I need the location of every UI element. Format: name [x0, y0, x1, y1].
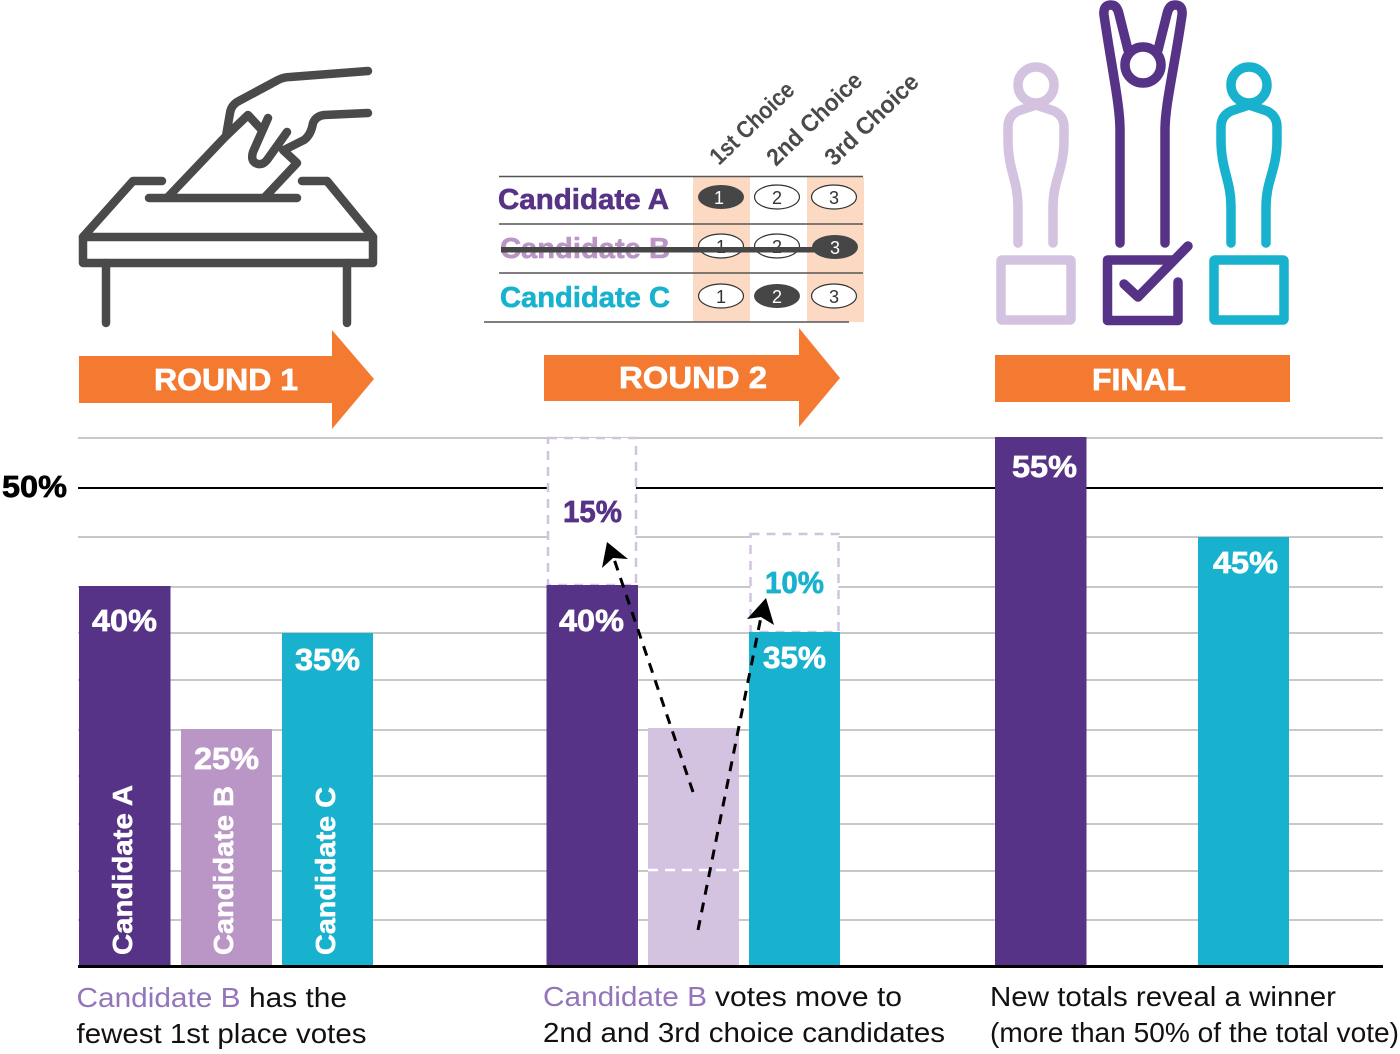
- icon: hand casting ballot into box: [83, 71, 373, 323]
- caption: Round 2: Candidate B: [543, 981, 707, 1012]
- ballot column header: 2nd Choice: 2nd Choice: [761, 67, 868, 171]
- icon: runner-up candidate C: [1214, 67, 1284, 320]
- bar: Candidate A 40% plus 15%: 15%: [563, 494, 622, 529]
- bar: Candidate C 35%: 35%: [295, 642, 360, 677]
- banner: Final: [995, 355, 1290, 402]
- bar: Candidate C 45%: [1198, 537, 1289, 966]
- 50% label: 50%: [2, 469, 67, 504]
- chart: Final bars: [995, 437, 1289, 966]
- caption: Round 1: fewest 1st place votes: [76, 1018, 367, 1049]
- bar: Candidate A 55%: [995, 437, 1086, 966]
- bar: Candidate A 40% plus 15%: [546, 438, 638, 965]
- caption: Round 2: [543, 981, 945, 1048]
- caption: Round 2: 2nd and 3rd choice candidates: [543, 1017, 945, 1048]
- bar: Candidate C 45%: 45%: [1213, 545, 1278, 580]
- bar: Candidate B redistributed: [648, 728, 739, 965]
- ballot row: Candidate B crossed out: 1: [716, 237, 726, 257]
- bar: Candidate A 40%: 40%: [92, 603, 157, 638]
- arrow: Round 2: ROUND 2: [619, 360, 767, 395]
- arrow: votes moving to Candidate C: [698, 598, 774, 930]
- ballot row: Candidate B crossed out: 3: [830, 238, 840, 258]
- arrow: Round 2: [544, 328, 840, 427]
- bar: Candidate C 35% plus 10%: 35%: [763, 640, 826, 675]
- ballot row: Candidate A: Candidate A: [498, 184, 669, 216]
- bar: Candidate C 35% plus 10%: 10%: [765, 565, 824, 600]
- icon: winning candidate A: [1104, 5, 1188, 320]
- bar: Candidate A 55%: 55%: [1012, 449, 1077, 484]
- ballot row: Candidate C: [500, 282, 856, 314]
- bar: Candidate C 35% plus 10%: [749, 534, 840, 965]
- ballot row: Candidate A: 2: [772, 188, 782, 208]
- bar: Candidate B 25%: 25%: [194, 741, 259, 776]
- arrow: votes moving to Candidate A: [602, 542, 693, 792]
- ballot row: Candidate C: Candidate C: [500, 282, 670, 314]
- icon: candidates with winner raising arms: [1001, 5, 1284, 320]
- caption: Round 1: [76, 982, 367, 1049]
- bar: Candidate A 40%: Candidate A: [107, 785, 138, 955]
- ballot row: Candidate A: 1: [714, 188, 724, 208]
- arrow: Round 1: ROUND 1: [154, 362, 298, 397]
- ballot column header: 1st Choice: 1st Choice: [704, 77, 800, 170]
- ballot row: Candidate C: 2: [772, 287, 782, 307]
- bar: Candidate C 35%: Candidate C: [310, 787, 341, 955]
- bar: Candidate B 25%: [181, 729, 272, 966]
- caption: Final: (more than 50% of the total vote): [990, 1017, 1399, 1048]
- caption: Final: New totals reveal a winner: [990, 981, 1336, 1012]
- icon: losing candidate B: [1001, 67, 1071, 320]
- arrow: Round 1: [79, 330, 374, 429]
- ballot row: Candidate C: 3: [829, 287, 839, 307]
- 50% threshold line: [78, 487, 1383, 489]
- caption: Round 1: has the: [249, 982, 347, 1013]
- chart: Round 2 bars: [546, 438, 840, 965]
- ballot table: [484, 67, 924, 322]
- bar: Candidate A 40% plus 15%: 40%: [559, 603, 624, 638]
- banner: Final: FINAL: [1092, 362, 1186, 397]
- chart: Round 1 bars: [79, 586, 373, 966]
- ballot row: Candidate B crossed out: 2: [772, 237, 782, 257]
- caption: Final: [990, 981, 1399, 1048]
- bar: Candidate B 25%: Candidate B: [208, 786, 239, 955]
- ballot row: Candidate C: 1: [716, 287, 726, 307]
- caption: Round 2: votes move to: [715, 981, 902, 1012]
- ballot column header: 3rd Choice: 3rd Choice: [819, 69, 924, 171]
- bar: Candidate C 35%: [282, 633, 373, 966]
- ballot row: Candidate B crossed out: [500, 233, 858, 265]
- caption: Round 1: Candidate B: [76, 982, 240, 1013]
- ballot row: Candidate B crossed out: Candidate B: [500, 233, 670, 265]
- ballot row: Candidate A: [498, 184, 856, 216]
- ballot row: Candidate A: 3: [829, 188, 839, 208]
- bar: Candidate A 40%: [79, 586, 170, 966]
